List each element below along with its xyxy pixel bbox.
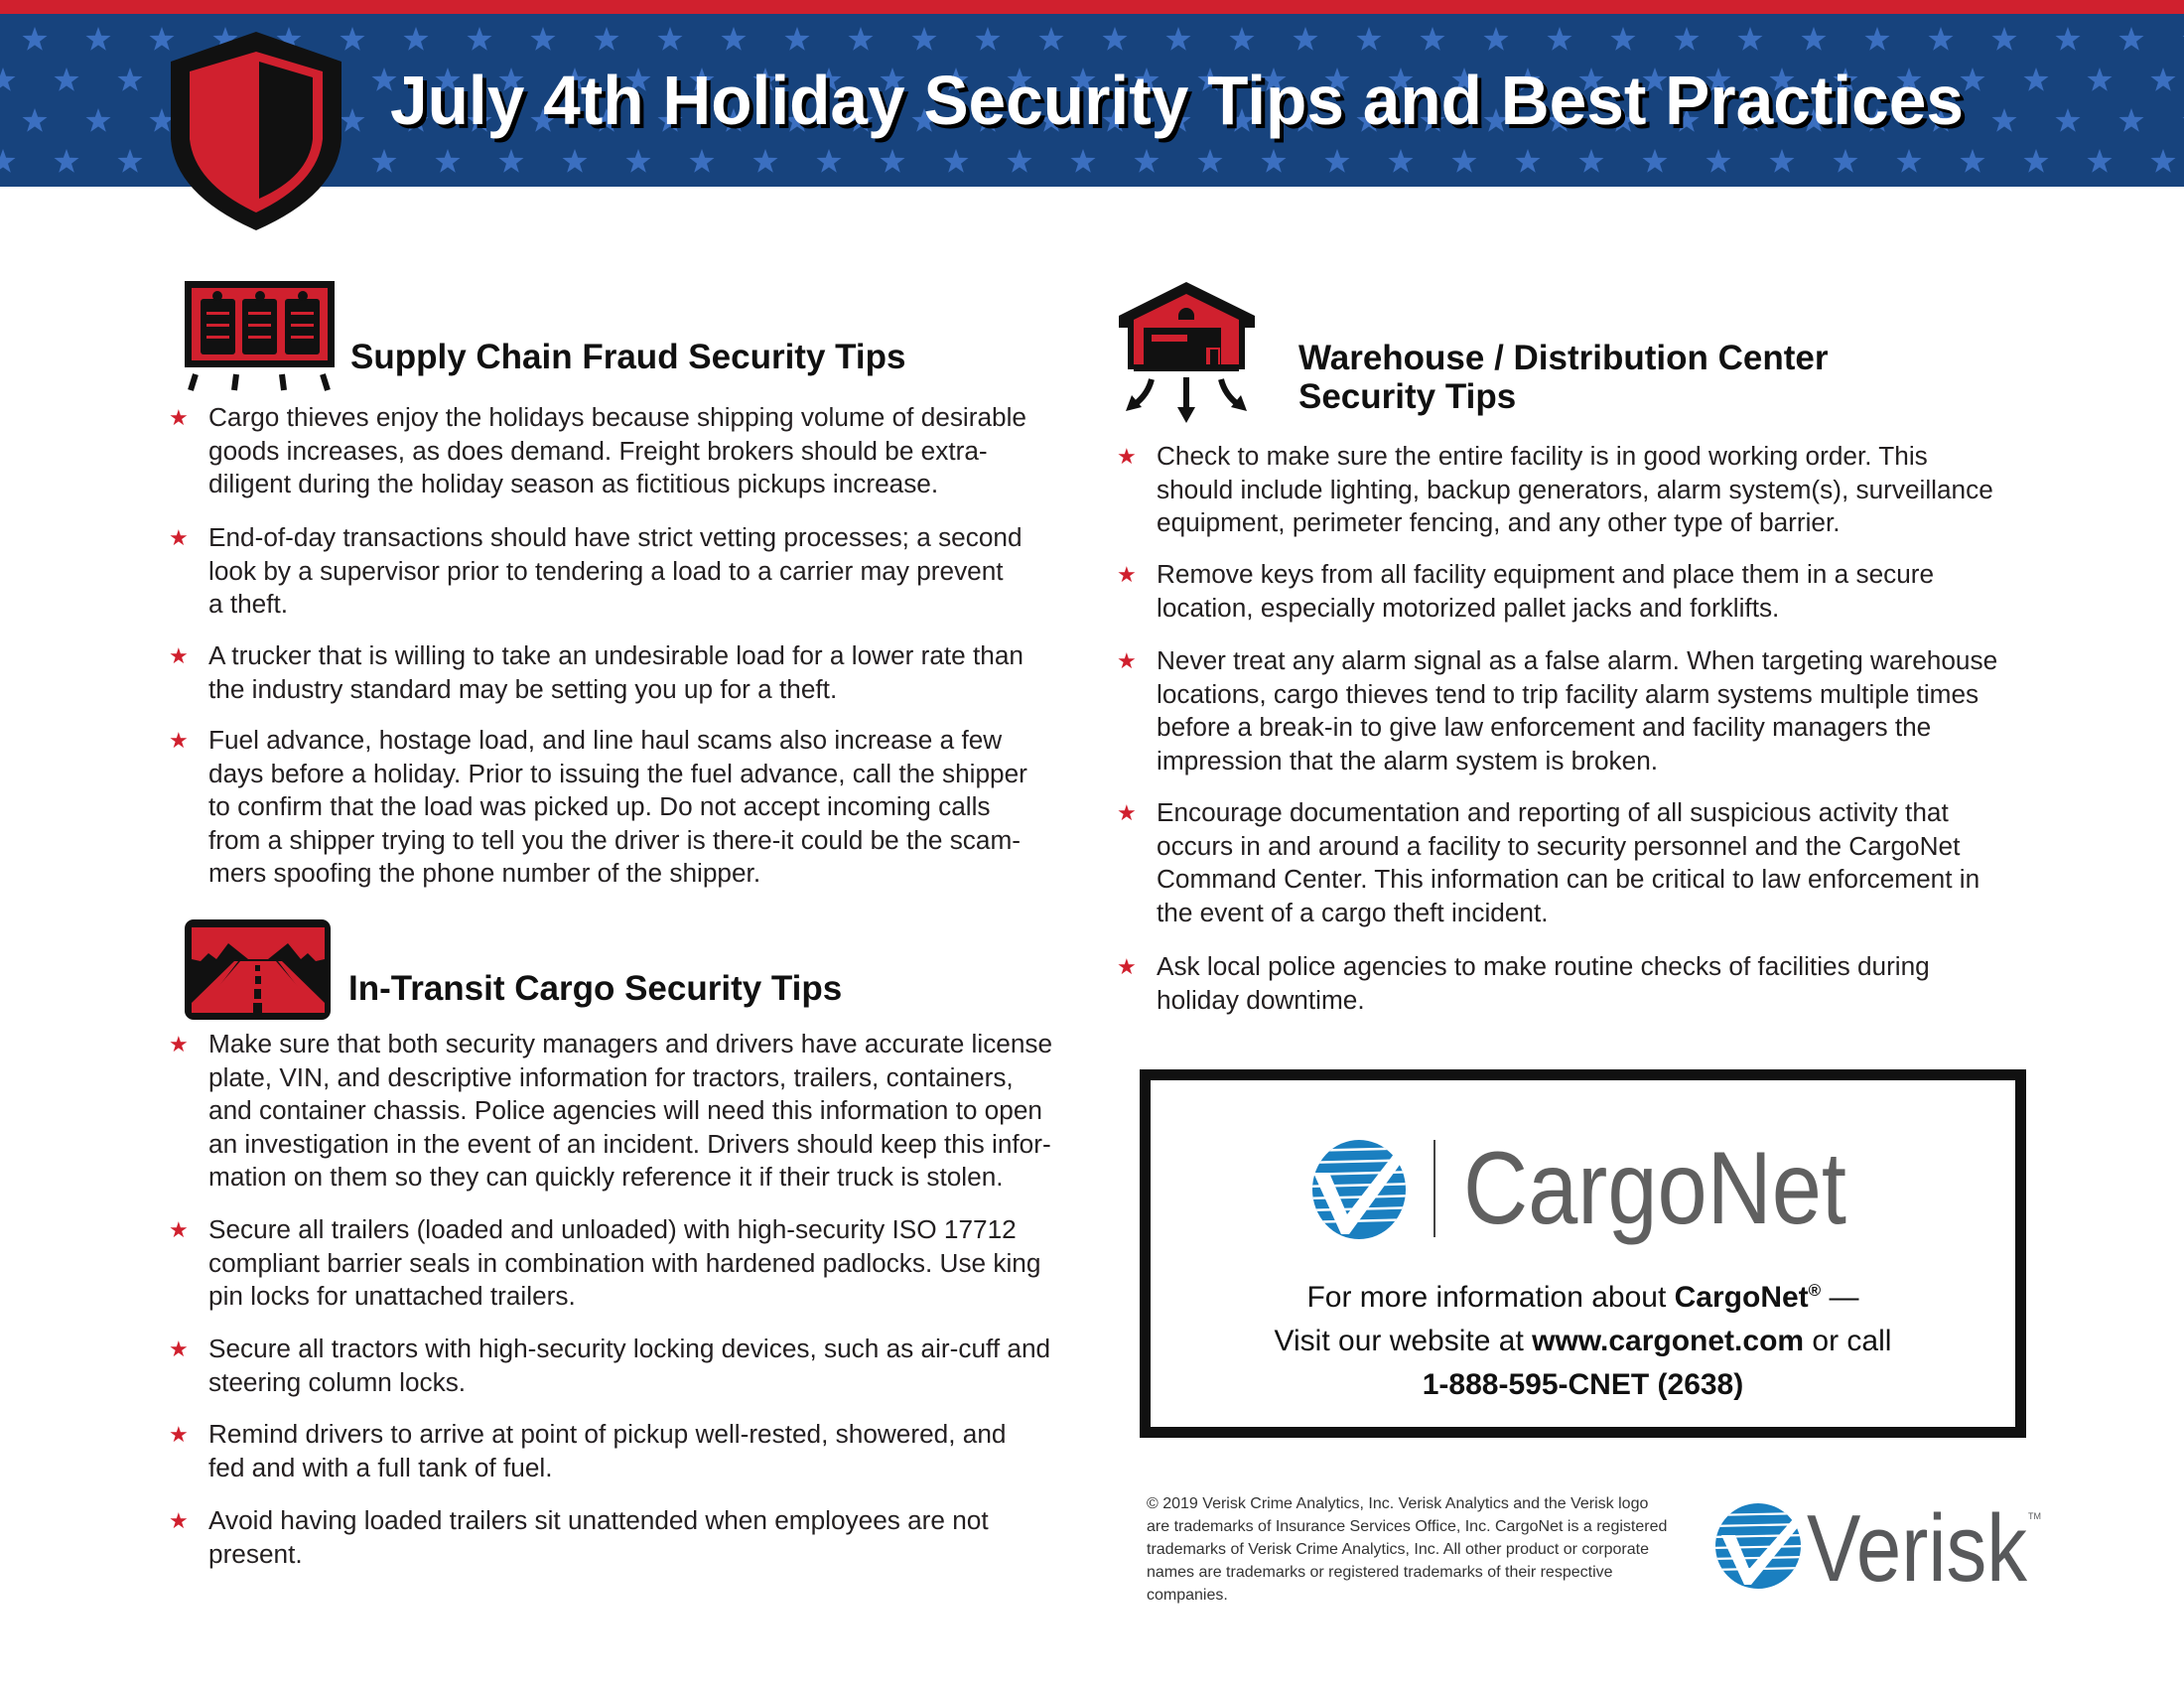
bullet 2: compliant barrier seals in combination with hardened padlocks. Use king [208, 1247, 1040, 1277]
bullet 3: A trucker that is willing to take an undesirable load for a lower rate than [208, 640, 1024, 670]
icon: warehouse [1119, 282, 1255, 423]
contact text [1275, 1281, 1891, 1401]
bullets: supply chain [169, 402, 1027, 888]
bullets: in-transit: ★ [169, 1508, 189, 1533]
bullet 3 [169, 640, 1024, 703]
bullets: warehouse: ★ [1117, 648, 1137, 673]
bullet 1: and container chassis. Police agencies will need this information to open [208, 1095, 1042, 1125]
Verisk logo: TM [2028, 1511, 2041, 1521]
bullet 1: mation on them so they can quickly reference it if their truck is stolen. [208, 1162, 1004, 1192]
bullets: supply chain: ★ [169, 525, 189, 550]
icon: road [185, 919, 331, 1020]
bullet 5: Ask local police agencies to make routine checks of facilities during [1157, 951, 1930, 981]
icon: shield [171, 32, 341, 230]
panel: CargoNet contact box [1140, 1069, 2026, 1438]
bullets: warehouse: ★ [1117, 800, 1137, 825]
heading: warehouse: Warehouse / Distribution Center [1298, 339, 1828, 377]
footer copyright text: names are trademarks or registered trademarks of their respective [1147, 1564, 1613, 1581]
bullet 4: from a shipper trying to tell you the driver is there-it could be the scam- [208, 824, 1021, 854]
bullet 1: an investigation in the event of an incident. Drivers should keep this infor- [208, 1128, 1051, 1158]
bullets: in-transit: ★ [169, 1336, 189, 1361]
bullet 1: Cargo thieves enjoy the holidays because shipping volume of desirable [208, 402, 1026, 432]
footer copyright text: © 2019 Verisk Crime Analytics, Inc. Verisk Analytics and the Verisk logo [1147, 1495, 1648, 1512]
bullets: warehouse [1117, 441, 1997, 1015]
bullets: supply chain: ★ [169, 728, 189, 753]
heading: warehouse: Security Tips [1298, 377, 1516, 416]
heading: warehouse [1298, 339, 1828, 416]
bullet 4: fed and with a full tank of fuel. [208, 1452, 552, 1481]
bullet 1: should include lighting, backup generators, alarm system(s), surveillance [1157, 475, 1993, 504]
footer copyright text: companies. [1147, 1587, 1228, 1604]
footer copyright text [1147, 1495, 1667, 1604]
bullets: supply chain: ★ [169, 643, 189, 668]
bullet 2 [1117, 559, 1934, 622]
bullet 4: Command Center. This information can be critical to law enforcement in [1157, 864, 1979, 894]
bullet 1: plate, VIN, and descriptive information for tractors, trailers, containers, [208, 1062, 1014, 1092]
icon: supply chain terminal [185, 281, 335, 391]
bullet 4: Remind drivers to arrive at point of pickup well-rested, showered, and [208, 1419, 1006, 1449]
bullet 5: holiday downtime. [1157, 985, 1365, 1015]
bullet 3: before a break-in to give law enforcement and facility managers the [1157, 712, 1931, 742]
bullet 1: diligent during the holiday season as fictitious pickups increase. [208, 469, 938, 498]
contact text: Visit our website at www.cargonet.com or call [1275, 1325, 1891, 1357]
bullets: in-transit [169, 1029, 1052, 1569]
title: July 4th Holiday Security Tips and Best Practices [390, 62, 1964, 139]
bullet 2: pin locks for unattached trailers. [208, 1281, 576, 1311]
bullet 3 [169, 1334, 1050, 1396]
bullet 2 [169, 1214, 1040, 1311]
bullet 5: present. [208, 1539, 303, 1569]
bullets: in-transit: ★ [169, 1032, 189, 1056]
bullet 1: Make sure that both security managers and drivers have accurate license [208, 1029, 1052, 1058]
bullet 3: the industry standard may be setting you up for a theft. [208, 673, 837, 703]
bullet 3: Secure all tractors with high-security locking devices, such as air-cuff and [208, 1334, 1050, 1363]
bullet 1 [1117, 441, 1993, 537]
bullet 4 [1117, 797, 1979, 927]
bullet 3: impression that the alarm system is broken. [1157, 745, 1658, 774]
bullet 4: to confirm that the load was picked up. Do not accept incoming calls [208, 791, 991, 821]
bullet 1: Check to make sure the entire facility is in good working order. This [1157, 441, 1928, 471]
bullet 2: Secure all trailers (loaded and unloaded) with high-security ISO 17712 [208, 1214, 1017, 1244]
bullet 3: Never treat any alarm signal as a false alarm. When targeting warehouse [1157, 645, 1997, 675]
bullet 4: mers spoofing the phone number of the shipper. [208, 858, 760, 888]
bullet 4: Fuel advance, hostage load, and line haul scams also increase a few [208, 725, 1002, 755]
header banner [0, 0, 2184, 187]
bullet 2: Remove keys from all facility equipment and place them in a secure [1157, 559, 1934, 589]
bullets: warehouse: ★ [1117, 444, 1137, 469]
bullet 3 [1117, 645, 1997, 774]
bullet 3: locations, cargo thieves tend to trip facility alarm systems multiple times [1157, 679, 1979, 709]
bullet 4: days before a holiday. Prior to issuing the fuel advance, call the shipper [208, 759, 1027, 788]
bullet 5 [169, 1505, 989, 1569]
bullet 1 [169, 1029, 1052, 1192]
bullet 2 [169, 522, 1023, 619]
bullet 4 [169, 1419, 1006, 1481]
heading: in-transit: In-Transit Cargo Security Tips [348, 969, 842, 1008]
bullets: in-transit: ★ [169, 1217, 189, 1242]
bullet 5: Avoid having loaded trailers sit unattended when employees are not [208, 1505, 989, 1535]
bullets: supply chain: ★ [169, 405, 189, 430]
footer copyright text: trademarks of Verisk Crime Analytics, Inc. All other product or corporate [1147, 1541, 1649, 1558]
bullet 3: steering column locks. [208, 1366, 466, 1396]
bullets: warehouse: ★ [1117, 954, 1137, 979]
title: July 4th Holiday Security Tips and Best Practices [394, 66, 1968, 143]
bullet 4: Encourage documentation and reporting of all suspicious activity that [1157, 797, 1949, 827]
bullet 1 [169, 402, 1026, 498]
bullets: in-transit: ★ [169, 1422, 189, 1447]
bullet 5 [1117, 951, 1930, 1015]
bullets: warehouse: ★ [1117, 562, 1137, 587]
bullet 1: equipment, perimeter fencing, and any other type of barrier. [1157, 507, 1841, 537]
bullet 2: look by a supervisor prior to tendering a load to a carrier may prevent [208, 556, 1004, 586]
contact text: For more information about CargoNet® — [1306, 1281, 1859, 1314]
bullet 4: occurs in and around a facility to security personnel and the CargoNet [1157, 830, 1960, 860]
footer copyright text: are trademarks of Insurance Services Office, Inc. CargoNet is a registered [1147, 1518, 1667, 1535]
bullet 2: a theft. [208, 589, 288, 619]
bullet 4 [169, 725, 1027, 888]
contact text: 1-888-595-CNET (2638) [1423, 1368, 1743, 1401]
heading: supply chain: Supply Chain Fraud Security Tips [350, 338, 905, 376]
bullet 2: End-of-day transactions should have strict vetting processes; a second [208, 522, 1023, 552]
bullet 1: goods increases, as does demand. Freight brokers should be extra- [208, 435, 988, 465]
bullet 4: the event of a cargo theft incident. [1157, 898, 1549, 927]
bullet 2: location, especially motorized pallet jacks and forklifts. [1157, 592, 1779, 622]
